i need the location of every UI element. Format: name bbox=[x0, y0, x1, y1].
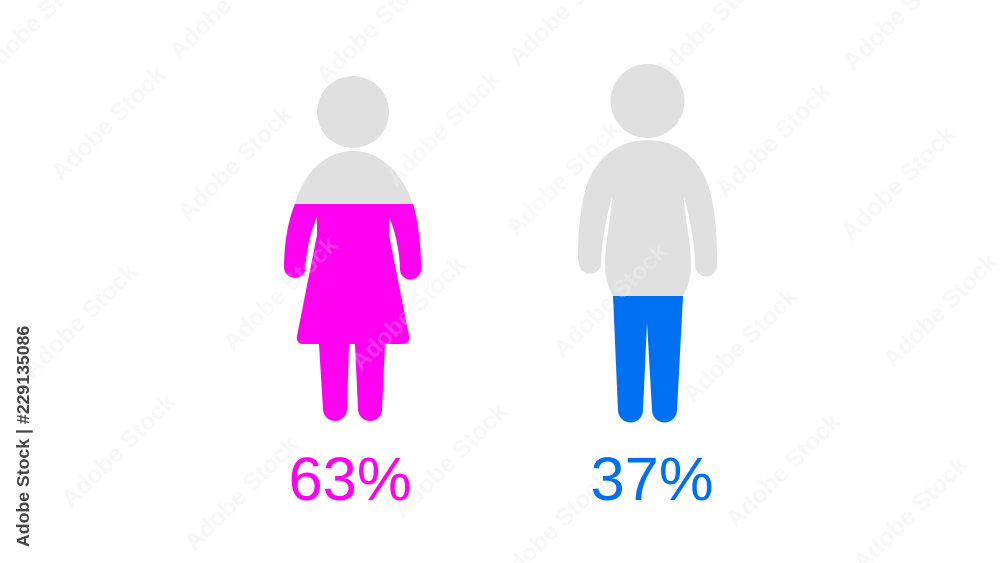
watermark pattern: Adobe Stock bbox=[179, 431, 304, 556]
infographic canvas bbox=[16, 64, 717, 547]
percentage label: male: 37% bbox=[590, 445, 714, 514]
percentage label: female: 63% bbox=[288, 445, 412, 514]
watermark pattern: Adobe Stock bbox=[388, 398, 513, 523]
watermark pattern: Adobe Stock bbox=[46, 61, 171, 186]
icon: female body magenta fill bbox=[284, 204, 422, 421]
watermark overlay on figures bbox=[218, 66, 673, 376]
watermark overlay on figures: Adobe Stock bbox=[381, 66, 506, 191]
icon: male head bbox=[610, 64, 684, 138]
watermark pattern: Adobe Stock bbox=[836, 121, 961, 246]
watermark pattern: Adobe Stock bbox=[878, 248, 1000, 373]
watermark overlay on figures: Adobe Stock bbox=[218, 231, 343, 356]
icon: male body blue fill bbox=[613, 296, 683, 422]
watermark pattern: Adobe Stock bbox=[381, 66, 506, 191]
icon: female head bbox=[317, 76, 389, 148]
watermark pattern: Adobe Stock bbox=[501, 116, 626, 241]
watermark pattern: Adobe Stock bbox=[18, 258, 143, 383]
watermark pattern: Adobe Stock bbox=[548, 238, 673, 363]
watermark pattern: Adobe Stock bbox=[721, 408, 846, 533]
watermark overlay on figures: Adobe Stock bbox=[346, 251, 471, 376]
icon: male body grey base bbox=[578, 140, 717, 422]
watermark pattern: Adobe Stock bbox=[711, 78, 836, 203]
watermark overlay on figures: Adobe Stock bbox=[548, 238, 673, 363]
watermark pattern: Adobe Stock bbox=[56, 388, 181, 513]
male figure 37% filled bbox=[578, 64, 717, 422]
watermark pattern: Adobe Stock bbox=[173, 101, 298, 226]
watermark pattern: Adobe Stock bbox=[346, 251, 471, 376]
stock id caption: Adobe Stock | #229135086 bbox=[13, 326, 33, 547]
watermark overlay on figures: Adobe Stock bbox=[501, 116, 626, 241]
watermark pattern: Adobe Stock bbox=[218, 231, 343, 356]
female figure 63% filled bbox=[284, 76, 421, 421]
icon: female body grey base bbox=[284, 151, 421, 421]
watermark pattern: Adobe Stock bbox=[678, 283, 803, 408]
